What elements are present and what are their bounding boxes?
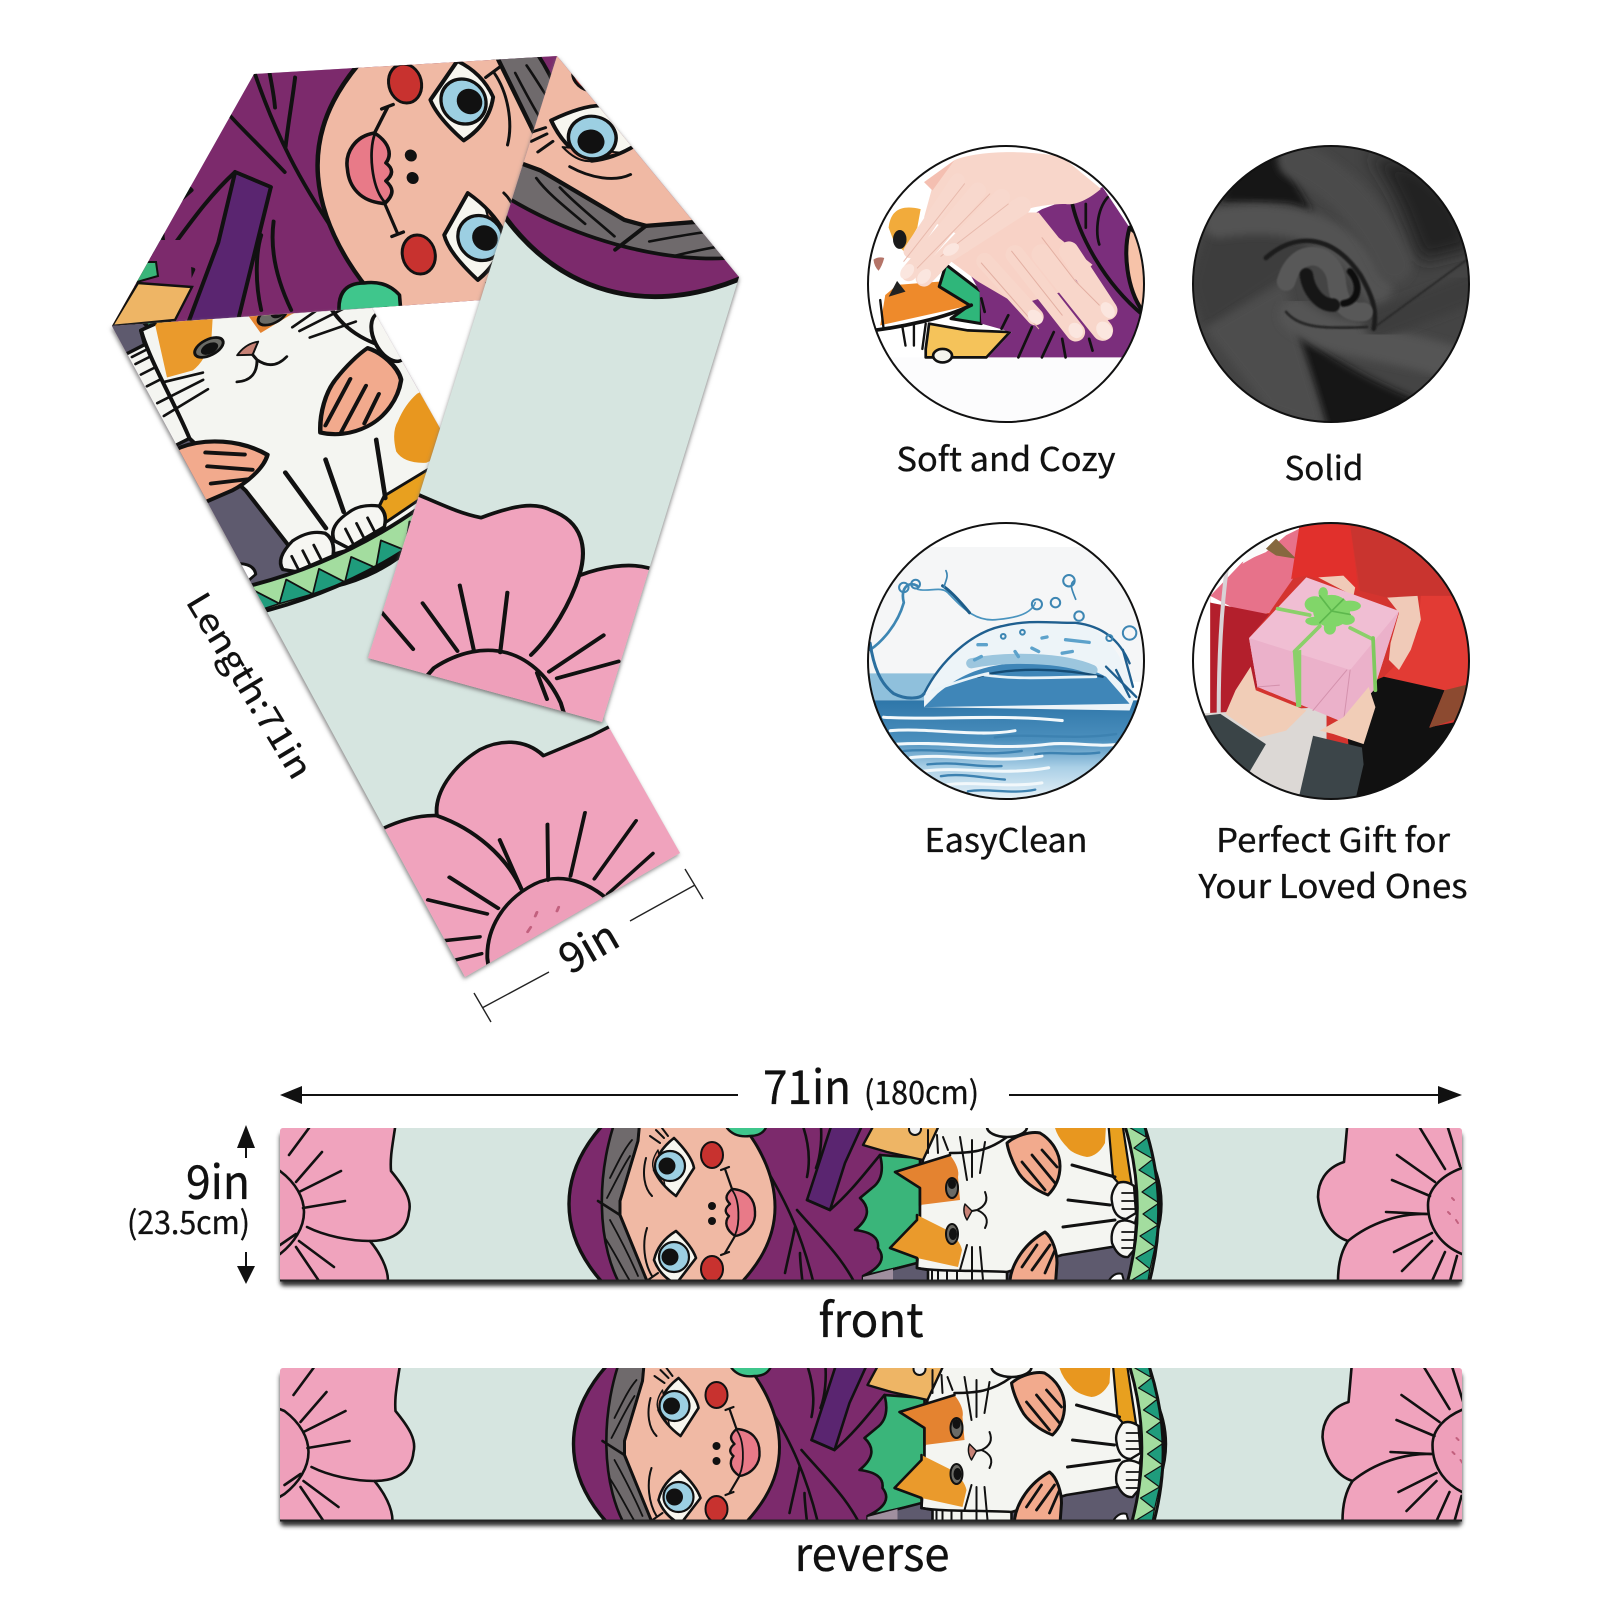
front strip bbox=[276, 1128, 1466, 1290]
icon: gift being handed over bbox=[1192, 522, 1470, 800]
scarf panel: lower strip with cat and flower bbox=[109, 308, 681, 981]
width dimension arrow up bbox=[237, 1125, 255, 1158]
label: scarf length: Length:71in bbox=[177, 582, 326, 787]
width label: 9in bbox=[186, 1144, 250, 1213]
reverse strip bbox=[276, 1368, 1466, 1530]
reverse label: reverse bbox=[794, 1516, 950, 1585]
icon: dark fabric swirl bbox=[1192, 145, 1470, 423]
scarf width dimension bbox=[474, 869, 703, 1022]
label: scarf width: 9in bbox=[546, 903, 629, 986]
width label in cm: (23.5cm) bbox=[127, 1198, 250, 1244]
feature: soft and cozy bbox=[860, 140, 1157, 481]
caption: Solid bbox=[1284, 442, 1364, 490]
feature: gift bbox=[1192, 522, 1470, 899]
caption: EasyClean bbox=[924, 814, 1088, 862]
caption: Perfect Gift for bbox=[1216, 814, 1450, 862]
scarf panel: right band with hood and flower bbox=[366, 56, 742, 726]
feature: easy clean bbox=[860, 515, 1157, 862]
feature: solid bbox=[1192, 145, 1470, 481]
front label: front bbox=[818, 1282, 924, 1351]
length dimension arrow left bbox=[280, 1086, 738, 1104]
length label: (180cm) bbox=[864, 1068, 979, 1114]
scarf panel: top band with face bbox=[112, 56, 557, 326]
caption: Your Loved Ones bbox=[1197, 860, 1468, 908]
icon: hands on scarf bbox=[867, 145, 1145, 423]
width dimension arrow down bbox=[237, 1252, 255, 1284]
length dimension arrow right bbox=[1009, 1086, 1462, 1104]
caption: Soft and Cozy bbox=[896, 433, 1116, 481]
icon: water splash bbox=[867, 522, 1145, 800]
folded scarf illustration bbox=[109, 56, 742, 981]
length label: 71in bbox=[763, 1049, 851, 1118]
